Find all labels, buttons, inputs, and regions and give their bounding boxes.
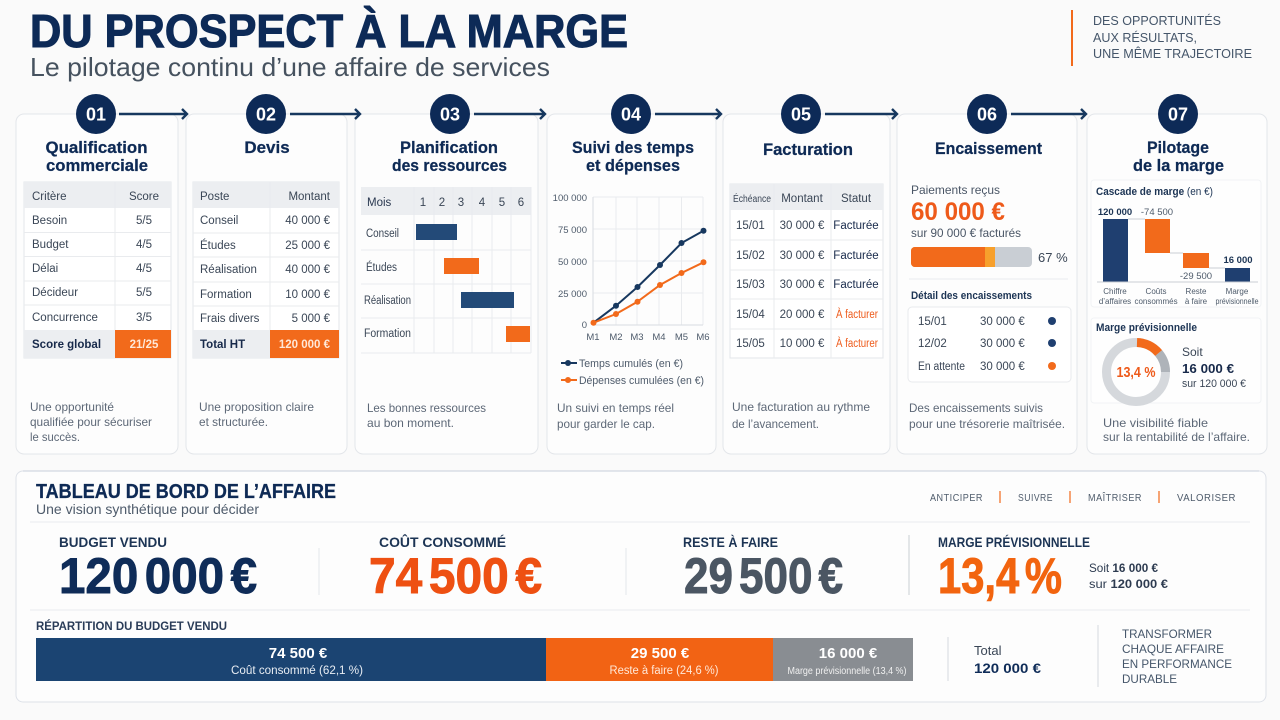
caption: de l’avancement. (732, 417, 819, 431)
KPI: budget vendu: 120 000 € (59, 548, 257, 604)
tagline (1071, 10, 1252, 66)
KPI: coût consommé: 74 500 € (369, 548, 542, 604)
heading: planification: des ressources (392, 156, 507, 175)
table: devis: 40 000 € (285, 215, 331, 227)
table: échéancier: 15/01 (736, 220, 765, 232)
table: échéancier: 15/02 (736, 250, 765, 262)
waterfall chart: Chiffre (1103, 287, 1127, 296)
payment details: 30 000 € (980, 361, 1025, 373)
line chart: 0 (582, 320, 587, 331)
dashboard subtitle: Une vision synthétique pour décider (36, 501, 259, 517)
caption: Des encaissements suivis (909, 401, 1043, 415)
gantt chart: 1 (420, 197, 426, 209)
panel: 02 devis (186, 114, 347, 454)
caption (199, 400, 314, 429)
caption: qualifiée pour sécuriser (30, 415, 152, 429)
keywords: ANTICIPER (930, 492, 983, 504)
table: échéancier: 30 000 € (780, 220, 825, 232)
heading: pilotage: Pilotage (1147, 138, 1209, 157)
keywords (930, 491, 1236, 504)
table: échéancier: 15/05 (736, 338, 765, 350)
heading: qualification: commerciale (46, 156, 148, 175)
total: Total (974, 643, 1002, 658)
table: échéancier: Échéance (733, 192, 771, 205)
panel: 06 encaissement (897, 114, 1077, 454)
step numbers: 06 (977, 104, 997, 124)
closing statement: TRANSFORMER (1122, 627, 1212, 641)
legend: Dépenses cumulées (en €) (579, 375, 704, 387)
panel: 05 facturation (723, 114, 890, 454)
stacked bar: 29 500 € (631, 645, 690, 662)
stacked bar: 16 000 € (819, 645, 878, 662)
KPI: marge prévisionnelle: 13,4 % (938, 548, 1062, 604)
stacked bar: Marge prévisionnelle (13,4 %) (788, 666, 906, 677)
payment details: 30 000 € (980, 316, 1025, 328)
caption: et structurée. (199, 415, 268, 429)
legend (561, 358, 704, 387)
waterfall chart: -74 500 (1141, 207, 1173, 218)
table: devis: 5 000 € (292, 313, 331, 325)
legend: Temps cumulés (en €) (579, 358, 683, 370)
table: scoring: 4/5 (136, 239, 152, 251)
table: échéancier: Facturée (833, 279, 879, 291)
margin donut: 16 000 € (1182, 361, 1234, 376)
gantt chart: 4 (479, 197, 486, 209)
gantt chart: Mois (367, 197, 392, 209)
caption: Un suivi en temps réel (557, 401, 674, 415)
heading: planification (392, 138, 507, 175)
waterfall chart (1091, 180, 1261, 307)
payment summary: sur 90 000 € facturés (911, 226, 1021, 240)
line chart: M4 (652, 332, 666, 343)
subtitle: Le pilotage continu d’une affaire de services (30, 52, 550, 82)
stacked bar: 74 500 € (269, 645, 328, 662)
table: scoring: 3/5 (136, 312, 152, 324)
waterfall chart: prévisionnelle (1216, 297, 1259, 306)
table: devis: Réalisation (200, 264, 257, 276)
caption: Une opportunité (30, 400, 114, 414)
panel: 07 pilotage (1087, 114, 1267, 454)
tagline: AUX RÉSULTATS, (1093, 30, 1197, 45)
keywords: VALORISER (1177, 492, 1236, 504)
stacked bar: Coût consommé (62,1 %) (231, 665, 363, 677)
caption (367, 401, 486, 430)
table: devis: 40 000 € (285, 264, 331, 276)
KPI: marge prévisionnelle: Soit 16 000 € (1089, 561, 1158, 575)
gantt chart: 3 (458, 197, 464, 209)
progress bar 67 %: 67 % (1038, 250, 1068, 265)
table: échéancier: 15/03 (736, 279, 765, 291)
line chart: M5 (675, 332, 688, 343)
table: échéancier: 10 000 € (780, 338, 825, 350)
gantt chart (361, 187, 531, 353)
keywords: MAÎTRISER (1088, 491, 1142, 504)
stacked bar (36, 638, 913, 681)
heading: qualification: Qualification (46, 138, 148, 157)
closing statement (1098, 625, 1232, 687)
closing statement: EN PERFORMANCE (1122, 657, 1232, 671)
table: échéancier: Montant (781, 193, 824, 205)
table: échéancier: Facturée (833, 220, 879, 232)
step numbers: 03 (440, 104, 460, 124)
margin donut (1091, 318, 1261, 403)
margin donut: sur 120 000 € (1182, 378, 1246, 390)
table: devis: Montant (288, 191, 331, 203)
line chart: 25 000 (558, 289, 587, 300)
step numbers: 04 (621, 104, 641, 124)
gantt chart: 5 (499, 197, 505, 209)
heading: planification: Planification (400, 138, 498, 157)
KPI: budget vendu: BUDGET VENDU (59, 534, 167, 550)
heading: qualification (46, 138, 148, 175)
KPI: marge prévisionnelle: MARGE PRÉVISIONNELLE (938, 534, 1090, 550)
step numbers: 02 (256, 104, 276, 124)
table: devis: Études (200, 239, 236, 252)
table: scoring: Délai (32, 263, 58, 275)
payment summary: 60 000 € (911, 198, 1005, 226)
table: scoring: Concurrence (32, 312, 98, 324)
step numbers: 07 (1168, 104, 1188, 124)
table: échéancier: 15/04 (736, 309, 765, 321)
table: scoring: 5/5 (136, 287, 152, 299)
caption: le succès. (30, 430, 80, 444)
line chart: M3 (630, 332, 644, 343)
caption: Une visibilité fiable (1103, 416, 1208, 430)
dashboard heading: TABLEAU DE BORD DE L’AFFAIRE (36, 481, 336, 503)
budget breakdown label: RÉPARTITION DU BUDGET VENDU (36, 618, 227, 633)
process arrows (119, 109, 1086, 119)
table: scoring: 4/5 (136, 263, 152, 275)
caption (30, 400, 152, 444)
caption: Une proposition claire (199, 400, 314, 414)
table: scoring: 21/25 (130, 339, 159, 351)
caption (732, 400, 870, 431)
table: scoring: Budget (32, 239, 69, 251)
table: scoring (24, 182, 171, 358)
KPI: reste à faire: RESTE À FAIRE (683, 534, 778, 550)
payment summary (911, 183, 1021, 240)
table: échéancier: Facturée (833, 250, 879, 262)
line chart: 50 000 (558, 257, 587, 268)
table: échéancier: À facturer (836, 337, 878, 350)
gantt chart: Études (366, 261, 397, 274)
gantt chart: 6 (518, 197, 524, 209)
waterfall chart: d’affaires (1099, 297, 1131, 306)
closing statement: CHAQUE AFFAIRE (1122, 642, 1224, 656)
table: scoring: Score (129, 191, 159, 203)
progress bar 67 % (911, 247, 1068, 267)
heading: facturation: Facturation (763, 140, 853, 159)
step numbers (76, 94, 1198, 134)
table: devis: 120 000 € (279, 339, 331, 351)
KPI: marge prévisionnelle: sur 120 000 € (1089, 577, 1168, 591)
waterfall chart: -29 500 (1180, 271, 1212, 282)
margin donut: Soit (1182, 345, 1203, 359)
caption: pour une trésorerie maîtrisée. (909, 417, 1065, 431)
waterfall chart: Coûts (1146, 287, 1166, 296)
table: devis: Conseil (200, 215, 238, 227)
table: échéancier: 30 000 € (780, 279, 825, 291)
heading: devis: Devis (244, 138, 290, 157)
heading: suivi: et dépenses (586, 156, 680, 175)
keywords: SUIVRE (1018, 492, 1053, 504)
waterfall chart: 120 000 (1098, 207, 1132, 218)
step numbers: 05 (791, 104, 811, 124)
payment details: 15/01 (918, 316, 947, 328)
caption: Une facturation au rythme (732, 400, 870, 414)
waterfall chart: consommés (1134, 297, 1178, 306)
waterfall chart: 16 000 (1223, 255, 1253, 266)
payment details: 30 000 € (980, 338, 1025, 350)
KPI: reste à faire: 29 500 € (684, 548, 843, 604)
table: devis: Total HT (200, 339, 245, 351)
table: échéancier: Statut (841, 193, 872, 205)
caption: pour garder le cap. (557, 417, 655, 431)
table: scoring: Score global (32, 339, 101, 351)
gantt chart: Réalisation (364, 295, 411, 307)
heading: suivi (572, 138, 694, 175)
table: devis: Poste (200, 191, 229, 203)
table: devis (193, 182, 339, 358)
line chart: 75 000 (558, 225, 587, 236)
table: scoring: Critère (32, 191, 67, 203)
line chart: 100 000 (553, 193, 587, 204)
caption: sur la rentabilité de l’affaire. (1103, 430, 1250, 444)
heading: pilotage: de la marge (1133, 156, 1224, 175)
table: échéancier: À facturer (836, 308, 878, 321)
KPI: coût consommé: COÛT CONSOMMÉ (379, 533, 506, 550)
heading: encaissement: Encaissement (935, 139, 1042, 158)
margin donut: 13,4 % (1116, 365, 1156, 381)
gantt chart: 2 (439, 197, 445, 209)
total: 120 000 € (974, 660, 1041, 676)
payment details: 12/02 (918, 338, 947, 350)
payment details: Détail des encaissements (911, 290, 1032, 302)
gantt chart: Conseil (366, 228, 399, 240)
heading: suivi: Suivi des temps (572, 138, 694, 157)
total (948, 637, 1041, 681)
waterfall chart: Cascade de marge (en €) (1096, 186, 1213, 198)
panel: tableau de bord (16, 471, 1266, 702)
table: scoring: Décideur (32, 287, 78, 299)
caption: Les bonnes ressources (367, 401, 486, 415)
closing statement: DURABLE (1122, 672, 1177, 686)
caption (557, 401, 674, 431)
title: DU PROSPECT À LA MARGE (30, 5, 628, 57)
table: devis: Formation (200, 289, 252, 301)
table: échéancier: 30 000 € (780, 250, 825, 262)
table: devis: 10 000 € (285, 289, 331, 301)
tagline: DES OPPORTUNITÉS (1093, 13, 1221, 28)
heading: pilotage (1133, 138, 1224, 175)
caption (1103, 416, 1250, 444)
caption: au bon moment. (367, 416, 454, 430)
panel: 01 qualification commerciale (16, 114, 178, 454)
payment details: En attente (918, 361, 965, 373)
table: échéancier (730, 184, 883, 358)
table: devis: 25 000 € (285, 240, 331, 252)
table: échéancier: 20 000 € (780, 309, 825, 321)
tagline: UNE MÊME TRAJECTOIRE (1093, 46, 1252, 61)
panel: 03 planification (355, 114, 538, 454)
step numbers: 01 (86, 104, 106, 124)
panel: 04 suivi (547, 114, 716, 454)
margin donut: Marge prévisionnelle (1096, 322, 1197, 334)
waterfall chart: Marge (1226, 287, 1249, 296)
payment details (908, 290, 1071, 382)
payment summary: Paiements reçus (911, 183, 1000, 197)
gantt chart: Formation (364, 328, 411, 340)
caption (909, 401, 1065, 431)
table: scoring: 5/5 (136, 215, 152, 227)
line chart: M2 (609, 332, 623, 343)
table: scoring: Besoin (32, 215, 67, 227)
table: devis: Frais divers (200, 313, 260, 325)
line chart: M1 (586, 332, 600, 343)
waterfall chart: Reste (1186, 287, 1207, 296)
line chart (553, 193, 710, 343)
waterfall chart: à faire (1185, 297, 1208, 306)
stacked bar: Reste à faire (24,6 %) (610, 665, 719, 677)
KPI: marge prévisionnelle (938, 534, 1168, 604)
line chart: M6 (696, 332, 710, 343)
